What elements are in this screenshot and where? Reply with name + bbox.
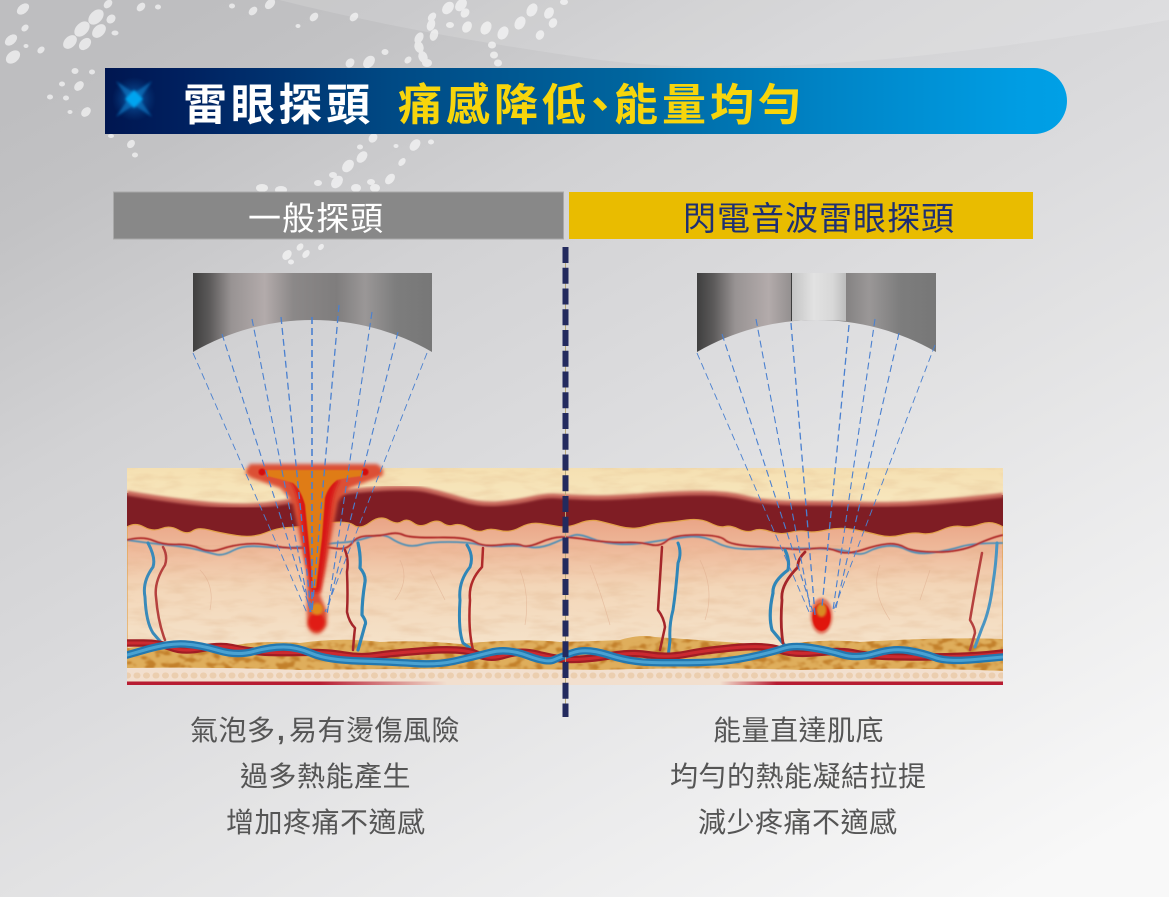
right column header [569, 192, 1033, 239]
right caption: 能量直達肌底 [713, 715, 884, 746]
left caption: 過多熱能產生 [240, 761, 411, 792]
faint capillary lines [200, 560, 930, 625]
right probe [697, 273, 936, 352]
deep blood vessels [127, 643, 1003, 664]
left caption: , [277, 715, 285, 746]
right column header: 閃電音波雷眼探頭 [683, 200, 955, 237]
left column header: 一般探頭 [248, 200, 384, 237]
right caption: 均勻的熱能凝結拉提 [670, 761, 927, 792]
vertical veins and arteries [144, 543, 997, 658]
title yellow text: 、 [578, 81, 626, 130]
icon: blue star [112, 77, 156, 121]
left caption: 增加疼痛不適感 [226, 807, 426, 838]
skin cross-section [127, 468, 1003, 685]
dermis dark red band [127, 486, 1003, 536]
left caption: 氣泡多 [190, 715, 276, 746]
center dashed divider [564, 247, 566, 717]
fat layer [127, 636, 1003, 671]
heat zone: wide T shape on left [246, 464, 383, 634]
left caption: 易有燙傷風險 [289, 715, 460, 746]
left caption [190, 715, 460, 838]
title yellow text: 能量均勻 [614, 81, 806, 130]
right caption [670, 715, 927, 838]
papillary dermis [127, 518, 1003, 685]
title white text: 雷眼探頭 [183, 81, 374, 130]
right caption: 減少疼痛不適感 [698, 807, 898, 838]
ultrasound beams: left probe [193, 305, 427, 615]
decorative dot pattern [3, 0, 568, 265]
superficial blood vessels [127, 533, 1003, 555]
heat zone: focal spot on right [810, 598, 832, 634]
lower skin layer [127, 668, 1003, 685]
left column header [114, 192, 564, 239]
title banner [105, 68, 1067, 134]
left probe [193, 273, 432, 352]
skin texture [127, 545, 1003, 640]
ultrasound beams: right probe [697, 319, 935, 615]
title yellow text: 痛感降低 [398, 81, 590, 130]
epidermis cream layer [127, 468, 1003, 504]
